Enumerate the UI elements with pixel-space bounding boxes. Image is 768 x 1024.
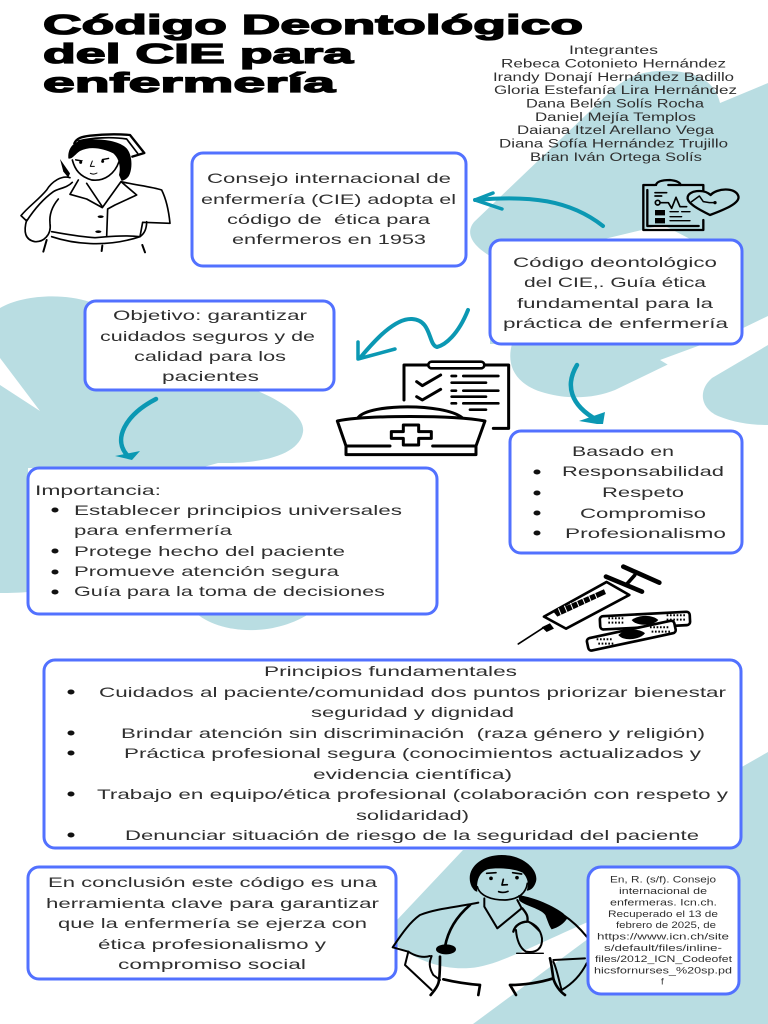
panel: importance: Promueve atención segura <box>74 563 339 579</box>
panel: objective: cuidados seguros y de <box>100 328 315 344</box>
panel: reference: hicsfornurses_%20sp.pd <box>594 966 732 976</box>
icon: clipboard and heart <box>643 180 739 230</box>
title: Código Deontológico <box>43 9 583 40</box>
panel: reference: En, R. (s/f). Consejo <box>610 874 716 886</box>
arrow: down to based on <box>571 365 605 424</box>
panel: deontological code <box>490 240 742 344</box>
panel: fundamental principles <box>44 660 741 848</box>
panel: conclusion: compromiso social <box>118 956 306 972</box>
panel: fundamental principles: Principios fundamentales <box>264 663 517 679</box>
panel: reference: Recuperado el 13 de <box>608 909 718 920</box>
panel: fundamental principles: Práctica profesional segura (conocimientos actualizados y <box>124 745 701 761</box>
team members list <box>493 45 737 164</box>
panel: CIE adopts code <box>192 153 466 266</box>
panel: deontological code: Código deontológico <box>513 254 717 270</box>
icon: clipboard and nurse cap <box>337 362 509 455</box>
arrow: down to importance <box>115 399 156 460</box>
arrow: to CIE panel <box>475 193 603 226</box>
panel: deontological code: práctica de enfermería <box>503 315 728 331</box>
panel: conclusion <box>28 867 396 979</box>
panel: fundamental principles: seguridad y dignidad <box>311 704 514 720</box>
panel: conclusion: que la enfermería se ejerza con <box>58 915 367 931</box>
panel: based on values: Compromiso <box>580 505 706 521</box>
team members list: Irandy Donají Hernández Badillo <box>493 72 734 84</box>
team members list: Diana Sofía Hernández Trujillo <box>499 138 728 150</box>
panel: based on values <box>510 431 742 553</box>
panel: based on values: Respeto <box>602 484 684 500</box>
panel: based on values: Responsabilidad <box>562 463 724 479</box>
panel: conclusion: ética profesionalismo y <box>98 936 326 952</box>
panel: CIE adopts code: código de ética para <box>227 211 430 227</box>
panel: importance: Importancia: <box>35 482 161 498</box>
team members list: Integrantes <box>569 45 658 57</box>
panel: reference: f <box>661 976 664 988</box>
panel: objective: calidad para los <box>134 348 286 364</box>
panel: importance: para enfermería <box>74 522 232 538</box>
panel: importance <box>28 468 437 614</box>
panel: CIE adopts code: Consejo internacional de <box>207 170 451 186</box>
icon: nurse with stethoscope <box>393 855 587 995</box>
panel: objective: Objetivo: garantizar <box>113 307 308 323</box>
title <box>43 9 583 98</box>
panel: fundamental principles: Brindar atención sin discriminación (raza género y religión) <box>121 725 705 741</box>
panel: importance: Guía para la toma de decisiones <box>74 583 385 599</box>
panel: based on values: Profesionalismo <box>565 525 726 541</box>
panel: conclusion: En conclusión este código es una <box>48 874 377 890</box>
team members list: Gloria Estefanía Lira Hernández <box>494 85 737 97</box>
panel: CIE adopts code: enfermería (CIE) adopta el <box>201 191 456 207</box>
team members list: Daiana Itzel Arellano Vega <box>517 125 715 137</box>
panel: objective <box>85 301 334 390</box>
panel: fundamental principles: solidaridad) <box>356 807 469 823</box>
panel: deontological code: del CIE,. Guía ética <box>524 274 706 290</box>
panel: based on values: Basado en <box>572 443 674 459</box>
team members list: Brian Iván Ortega Solís <box>530 152 702 164</box>
team members list: Rebeca Cotonieto Hernández <box>501 58 726 70</box>
title: del CIE para <box>43 38 354 69</box>
panel: fundamental principles: Cuidados al paciente/comunidad dos puntos priorizar bienestar <box>99 684 727 700</box>
panel: reference: s/default/files/inline- <box>604 943 722 954</box>
arrow: wavy to objective <box>358 310 468 359</box>
panel: reference: https://www.icn.ch/site <box>597 932 729 942</box>
panel: importance: Establecer principios universales <box>74 502 402 518</box>
panel: importance: Protege hecho del paciente <box>74 543 345 559</box>
panel: reference: febrero de 2025, de <box>616 920 716 931</box>
panel: fundamental principles: Denunciar situación de riesgo de la seguridad del paciente <box>125 827 699 843</box>
panel: fundamental principles: evidencia científica) <box>313 766 512 782</box>
panel: reference: internacional de <box>619 886 707 897</box>
panel: CIE adopts code: enfermeros en 1953 <box>232 231 426 247</box>
icon: syringe and bandages <box>518 567 690 651</box>
panel: objective: pacientes <box>162 368 259 384</box>
team members list: Daniel Mejía Templos <box>535 112 696 124</box>
panel: reference: enfermeras. Icn.ch. <box>610 898 717 908</box>
icon: nurse with pen <box>21 134 170 252</box>
title: enfermería <box>43 67 336 98</box>
panel: reference <box>588 867 739 994</box>
team members list: Dana Belén Solís Rocha <box>526 98 705 110</box>
panel: reference: files/2012_ICN_Codeofet <box>595 954 732 965</box>
panel: conclusion: herramienta clave para garantizar <box>46 895 380 911</box>
panel: deontological code: fundamental para la <box>517 295 713 311</box>
panel: fundamental principles: Trabajo en equipo/ética profesional (colaboración con respeto y <box>97 786 728 802</box>
